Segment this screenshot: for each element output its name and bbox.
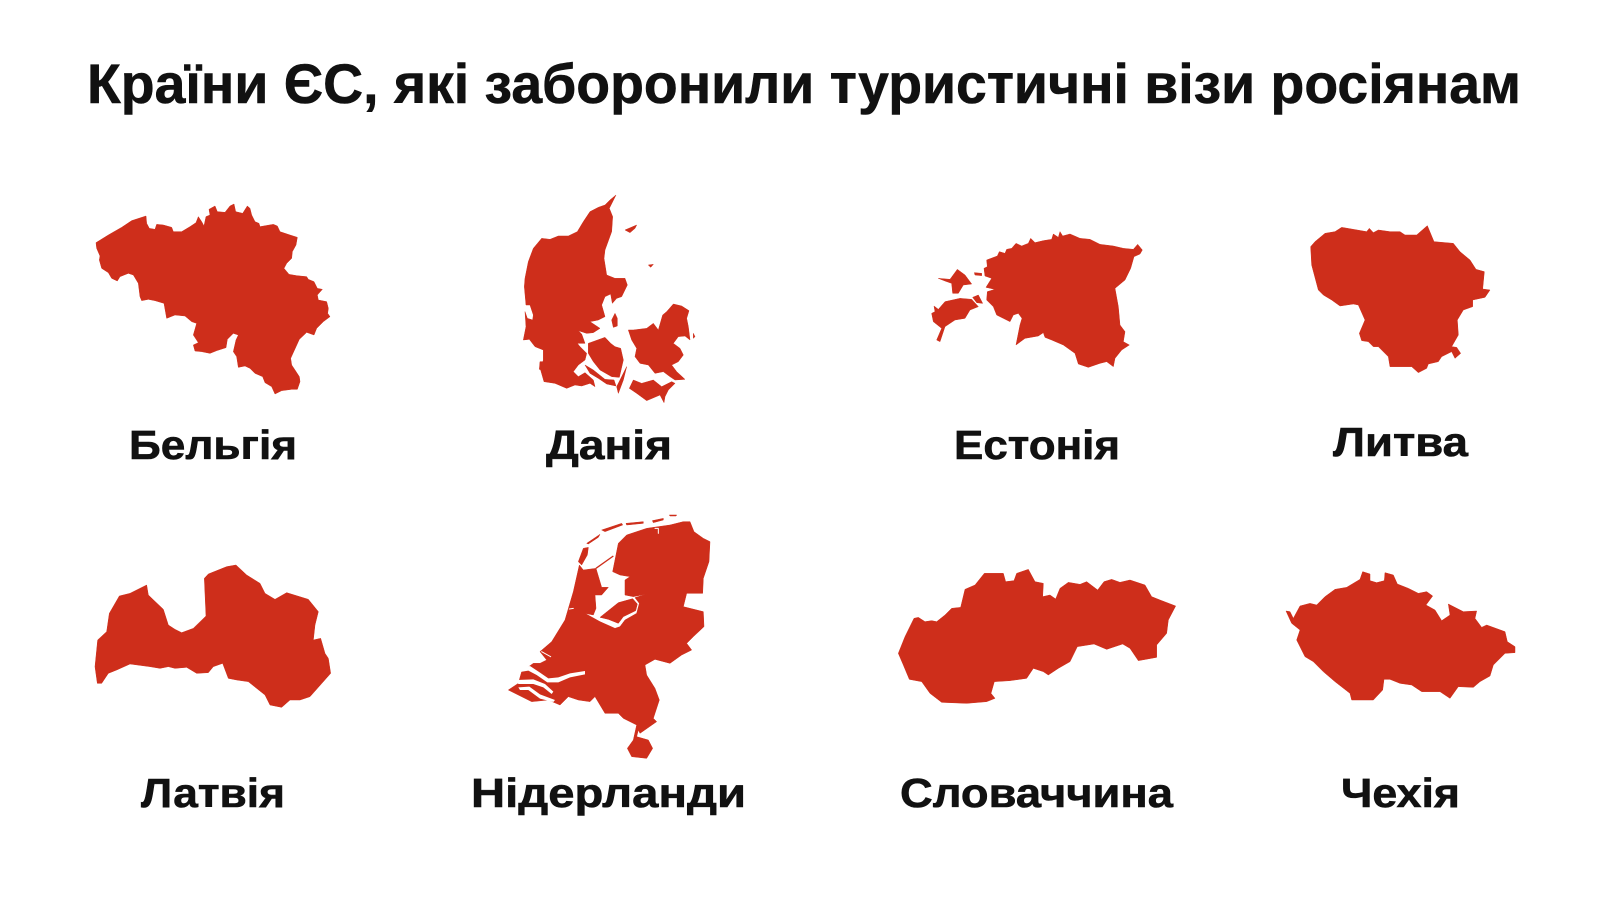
panel: Czechia bbox=[1286, 572, 1515, 816]
label: Belgium: Бельгія bbox=[129, 422, 297, 468]
map: Netherlands bbox=[508, 515, 710, 758]
panel: Lithuania bbox=[1311, 226, 1490, 465]
map: Czechia bbox=[1286, 572, 1515, 700]
map: Latvia bbox=[95, 565, 331, 707]
panel: Slovakia bbox=[898, 569, 1176, 816]
map: Lithuania bbox=[1311, 226, 1490, 373]
label: Czechia: Чехія bbox=[1341, 770, 1460, 816]
map: Belgium bbox=[96, 204, 330, 394]
panel: Netherlands bbox=[471, 515, 746, 816]
map: Denmark bbox=[523, 195, 695, 403]
title: Країни ЄС, які заборонили туристичні візи росіянам bbox=[87, 52, 1521, 115]
label: Estonia: Естонія bbox=[954, 422, 1120, 468]
label: Netherlands: Нідерланди bbox=[471, 770, 746, 816]
label: Denmark: Данія bbox=[546, 422, 672, 468]
label: Lithuania: Литва bbox=[1333, 419, 1469, 465]
panel: Belgium bbox=[96, 204, 330, 468]
panel: Latvia bbox=[95, 565, 331, 816]
panel: Estonia bbox=[932, 232, 1142, 468]
label: Latvia: Латвія bbox=[141, 770, 285, 816]
panel: Denmark bbox=[523, 195, 695, 468]
map: Estonia bbox=[932, 232, 1142, 367]
map: Slovakia bbox=[898, 569, 1176, 703]
label: Slovakia: Словаччина bbox=[900, 770, 1174, 816]
